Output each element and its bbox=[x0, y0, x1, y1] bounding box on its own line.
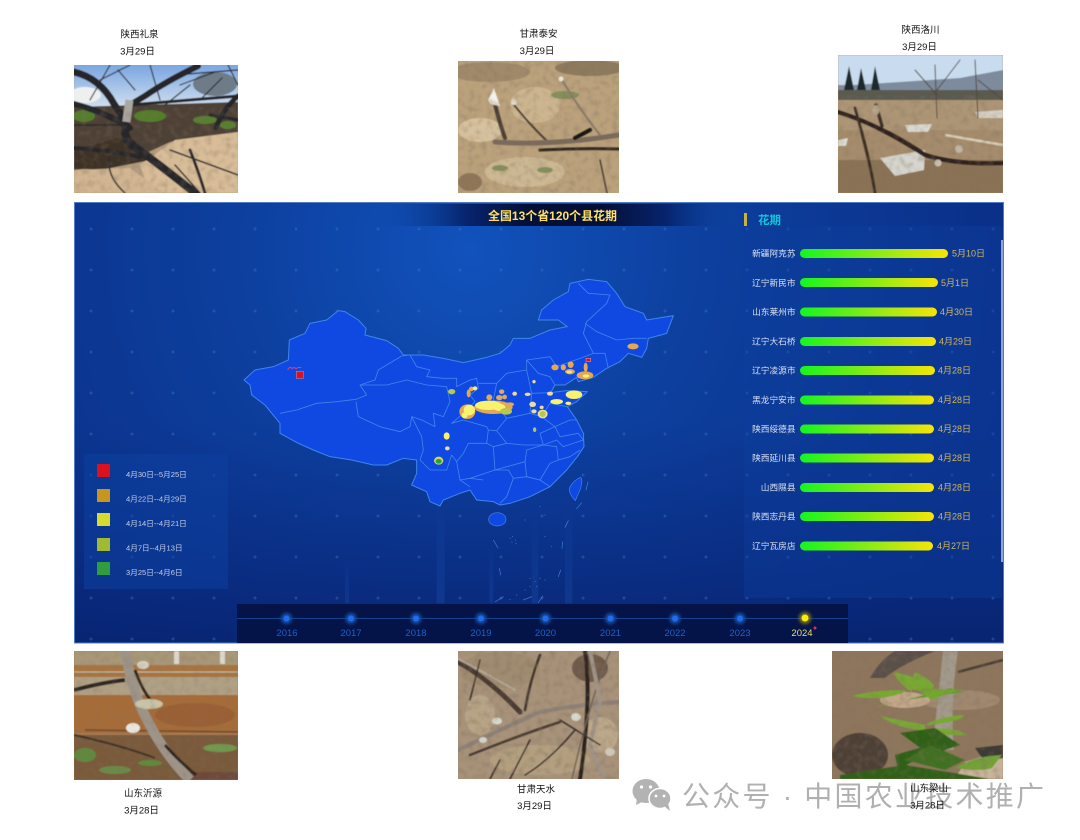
row: 新疆阿克苏 5月10日: 5月10日 bbox=[952, 248, 985, 258]
photo texture bbox=[74, 651, 238, 780]
row: 山东莱州市 4月30日 bbox=[752, 306, 973, 317]
caption: 甘肃泰安 3月29日: 甘肃泰安 bbox=[519, 28, 558, 40]
caption: 山东沂源 3月28日: 山东沂源 bbox=[124, 788, 162, 800]
row: 山西隰县 4月28日 bbox=[761, 482, 971, 492]
year 2021: 2021 bbox=[600, 628, 621, 639]
photo: 山东沂源 close-up trunk with bud bbox=[74, 651, 238, 780]
row: 陕西绥德县 4月28日: 4月28日 bbox=[938, 424, 971, 434]
year 2018: 2018 bbox=[405, 628, 427, 639]
caption: 甘肃泰安 3月29日 bbox=[519, 28, 558, 57]
legend item: 4月22日--4月29日: 4月22日--4月29日 bbox=[126, 494, 187, 504]
timeline axis bbox=[237, 618, 848, 619]
year 2024 selected: 2024 bbox=[791, 628, 813, 639]
row: 黑龙宁安市 4月28日 bbox=[752, 394, 971, 405]
row: 辽宁凌源市 4月28日 bbox=[752, 364, 971, 376]
scrollbar bbox=[1001, 240, 1003, 562]
icon: wechat bbox=[632, 779, 671, 811]
row: 辽宁大石桥 4月29日: 4月29日 bbox=[939, 336, 972, 346]
timeline background bbox=[237, 604, 848, 643]
panel border bbox=[74, 202, 1004, 643]
text: 公众号 · 中国农业技术推广: 公众号 · 中国农业技术推广 bbox=[682, 781, 1044, 812]
photo texture bbox=[458, 61, 619, 193]
row: 陕西志丹县 4月28日: 4月28日 bbox=[938, 512, 971, 522]
photo: 甘肃泰安 branch with blossom buds on sandy soil bbox=[450, 60, 625, 193]
dashboard panel bbox=[74, 202, 1004, 643]
photo: 山东梁山 young green leaves by trunk bbox=[832, 651, 1003, 779]
row: 黑龙宁安市 4月28日: 4月28日 bbox=[938, 395, 971, 405]
caption: 山东梁山 3月28日: 山东梁山 bbox=[910, 782, 948, 794]
row: 陕西绥德县 4月28日 bbox=[752, 423, 971, 434]
row: 新疆阿克苏 5月10日 bbox=[752, 248, 985, 258]
row: 陕西延川县 4月28日: 陕西延川县 bbox=[752, 452, 796, 463]
row: 山西隰县 4月28日: 4月28日 bbox=[938, 482, 971, 492]
vertical light streaks bbox=[345, 497, 572, 603]
caption: 甘肃天水 3月29日 bbox=[517, 784, 555, 812]
caption: 山东梁山 3月28日 bbox=[910, 782, 948, 812]
caption: 陕西礼泉 3月29日 bbox=[120, 28, 159, 58]
caption: 山东梁山 3月28日: 3月28日 bbox=[910, 800, 945, 812]
caption: 山东沂源 3月28日: 3月28日 bbox=[124, 806, 159, 816]
legend background bbox=[84, 454, 228, 589]
right panel: 花期 ranking bbox=[744, 213, 1003, 598]
caption: 陕西洛川 3月29日: 3月29日 bbox=[902, 42, 937, 53]
hainan island bbox=[489, 513, 506, 526]
legend item: 4月7日--4月13日 bbox=[97, 538, 183, 552]
photo texture bbox=[458, 651, 619, 779]
year 2016 bbox=[276, 613, 298, 639]
photo: 陕西礼泉 apple orchard under sky bbox=[69, 65, 238, 193]
caption: 陕西礼泉 3月29日: 3月29日 bbox=[120, 46, 155, 58]
photo: 甘肃天水 branches with small buds bbox=[458, 651, 619, 779]
photo texture bbox=[74, 107, 238, 193]
timeline bbox=[237, 604, 848, 643]
year 2019: 2019 bbox=[470, 628, 492, 639]
caption: 甘肃天水 3月29日: 甘肃天水 bbox=[517, 784, 555, 796]
title: 全国13个省120个县花期 bbox=[488, 208, 617, 223]
year 2019 bbox=[470, 613, 492, 639]
row: 辽宁瓦房店 4月27日: 4月27日 bbox=[937, 541, 970, 551]
legend item: 3月25日--4月6日 bbox=[97, 562, 183, 577]
year 2016: 2016 bbox=[276, 628, 298, 639]
row: 辽宁新民市 5月1日: 辽宁新民市 bbox=[752, 277, 796, 288]
taiwan island bbox=[569, 477, 582, 501]
heading: 花期 bbox=[758, 213, 781, 227]
caption: 陕西礼泉 3月29日: 陕西礼泉 bbox=[120, 28, 159, 40]
red region: 新疆阿克苏 bbox=[288, 358, 591, 378]
year 2018 bbox=[405, 613, 427, 639]
ranking background bbox=[744, 226, 1002, 598]
watermark bbox=[632, 779, 1044, 812]
legend item: 4月30日--5月25日 bbox=[97, 464, 187, 479]
year 2022 bbox=[664, 613, 686, 639]
row: 辽宁大石桥 4月29日: 辽宁大石桥 bbox=[752, 336, 796, 346]
caption: 甘肃天水 3月29日: 3月29日 bbox=[517, 801, 552, 812]
legend item: 4月14日--4月21日: 4月14日--4月21日 bbox=[126, 519, 187, 528]
year 2024 selected bbox=[791, 612, 816, 639]
background dot grid bbox=[75, 226, 1003, 643]
row: 辽宁大石桥 4月29日 bbox=[752, 336, 972, 346]
row: 辽宁凌源市 4月28日: 辽宁凌源市 bbox=[752, 364, 796, 376]
row: 辽宁新民市 5月1日: 5月1日 bbox=[941, 278, 969, 288]
legend item: 4月7日--4月13日: 4月7日--4月13日 bbox=[126, 544, 183, 552]
row: 山西隰县 4月28日: 山西隰县 bbox=[761, 482, 796, 492]
heading marker bbox=[744, 213, 747, 226]
row: 辽宁凌源市 4月28日: 4月28日 bbox=[938, 366, 971, 376]
province borders bbox=[280, 283, 647, 503]
year 2023: 2023 bbox=[729, 628, 751, 639]
photo texture bbox=[832, 651, 1003, 779]
caption: 陕西洛川 3月29日: 陕西洛川 bbox=[901, 24, 940, 36]
caption: 甘肃泰安 3月29日: 3月29日 bbox=[520, 46, 554, 57]
legend item: 3月25日--4月6日: 3月25日--4月6日 bbox=[126, 568, 183, 577]
row: 辽宁新民市 5月1日 bbox=[752, 277, 969, 288]
header banner bbox=[375, 204, 740, 226]
caption: 山东沂源 3月28日 bbox=[124, 788, 162, 816]
legend item: 4月22日--4月29日 bbox=[97, 489, 187, 504]
south china sea islands bbox=[493, 482, 588, 603]
flowering regions bbox=[434, 343, 639, 465]
row: 新疆阿克苏 5月10日: 新疆阿克苏 bbox=[752, 248, 796, 258]
year 2017 bbox=[340, 613, 362, 639]
photo texture bbox=[838, 95, 1003, 193]
panel lower shading bbox=[75, 420, 1003, 643]
row: 陕西志丹县 4月28日 bbox=[752, 510, 971, 522]
row: 辽宁瓦房店 4月27日 bbox=[752, 540, 970, 551]
row: 陕西延川县 4月28日: 4月28日 bbox=[938, 453, 971, 463]
year 2020: 2020 bbox=[535, 628, 556, 639]
year 2017: 2017 bbox=[340, 628, 362, 639]
caption: 陕西洛川 3月29日 bbox=[901, 24, 940, 53]
row: 山东莱州市 4月30日: 4月30日 bbox=[940, 307, 973, 317]
year 2021 bbox=[600, 613, 621, 639]
row: 陕西绥德县 4月28日: 陕西绥德县 bbox=[752, 423, 796, 434]
year 2020 bbox=[535, 613, 556, 639]
year 2023 bbox=[729, 613, 751, 639]
legend item: 4月14日--4月21日 bbox=[97, 513, 187, 528]
photo: 陕西洛川 orchard with distant trees and branch bbox=[838, 55, 1003, 193]
row: 辽宁瓦房店 4月27日: 辽宁瓦房店 bbox=[752, 540, 796, 551]
panel background bbox=[74, 202, 1004, 643]
year 2022: 2022 bbox=[664, 628, 686, 639]
mainland outline bbox=[244, 279, 673, 506]
row: 山东莱州市 4月30日: 山东莱州市 bbox=[752, 306, 796, 317]
row: 陕西延川县 4月28日 bbox=[752, 452, 971, 463]
legend bbox=[84, 454, 228, 589]
china map bbox=[244, 279, 673, 603]
row: 黑龙宁安市 4月28日: 黑龙宁安市 bbox=[752, 394, 796, 405]
row: 陕西志丹县 4月28日: 陕西志丹县 bbox=[752, 510, 796, 522]
legend item: 4月30日--5月25日: 4月30日--5月25日 bbox=[126, 470, 187, 479]
